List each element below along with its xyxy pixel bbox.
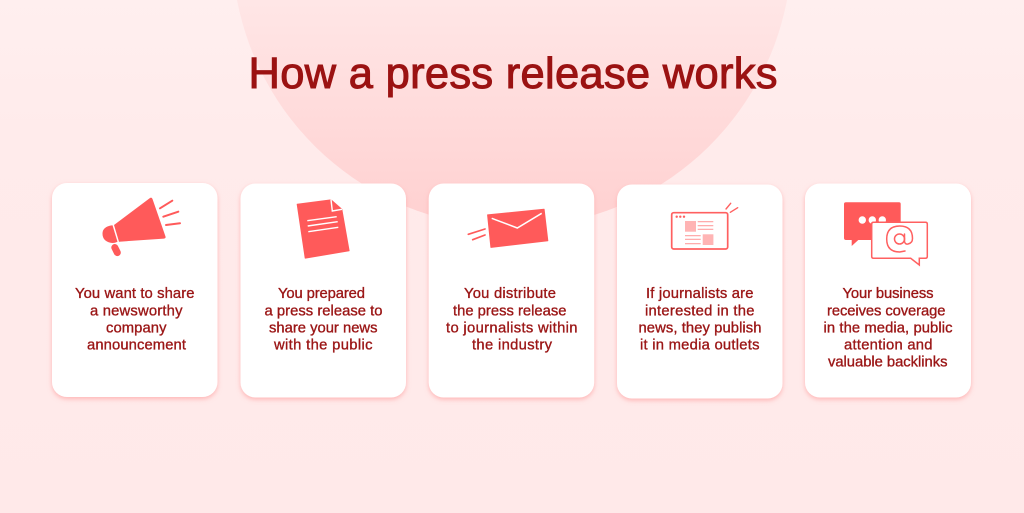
step 1 text: company — [106, 320, 167, 336]
step 5 text: receives coverage — [827, 304, 946, 320]
step 3 text: the press release — [453, 304, 566, 320]
step 2 text: with the public — [273, 338, 373, 354]
step 1 text: a newsworthy — [90, 304, 183, 320]
step 2 text: a press release to — [264, 304, 382, 320]
step 1 text: You want to share — [75, 286, 194, 302]
panel: step 5 coverage — [805, 184, 971, 398]
panel: step 4 journalists publish — [617, 184, 782, 398]
panel: step 3 distribute — [429, 184, 594, 398]
panel: step 2 press release — [240, 184, 406, 398]
panel: step 1 want to share — [52, 183, 218, 397]
icon: document — [297, 200, 349, 258]
icon: envelope — [468, 209, 548, 247]
step 2 text: share your news — [269, 320, 378, 336]
step 5 text: valuable backlinks — [828, 354, 948, 370]
step 3 text — [446, 286, 578, 354]
step 4 text: If journalists are — [646, 286, 754, 302]
step 4 text: news, they publish — [638, 320, 762, 336]
step 3 text: the industry — [472, 338, 553, 354]
step 1 text — [75, 286, 194, 354]
icon: browser article — [672, 203, 738, 249]
icon: chat bubbles — [844, 202, 927, 265]
step 2 text — [264, 286, 382, 354]
step 2 text: You prepared — [278, 286, 365, 302]
step 5 text: attention and — [844, 338, 932, 354]
background circle — [237, 0, 787, 227]
step 4 text: it in media outlets — [640, 338, 760, 354]
step 3 text: You distribute — [464, 286, 556, 302]
step 5 text: in the media, public — [824, 320, 953, 336]
step 3 text: to journalists within — [446, 320, 578, 336]
step 5 text: Your business — [842, 286, 934, 302]
step 4 text — [638, 286, 762, 354]
icon: megaphone — [102, 198, 180, 253]
step 4 text: interested in the — [645, 304, 754, 320]
title: How a press release works — [248, 50, 778, 98]
step 5 text — [824, 286, 953, 370]
step 1 text: announcement — [87, 338, 186, 354]
